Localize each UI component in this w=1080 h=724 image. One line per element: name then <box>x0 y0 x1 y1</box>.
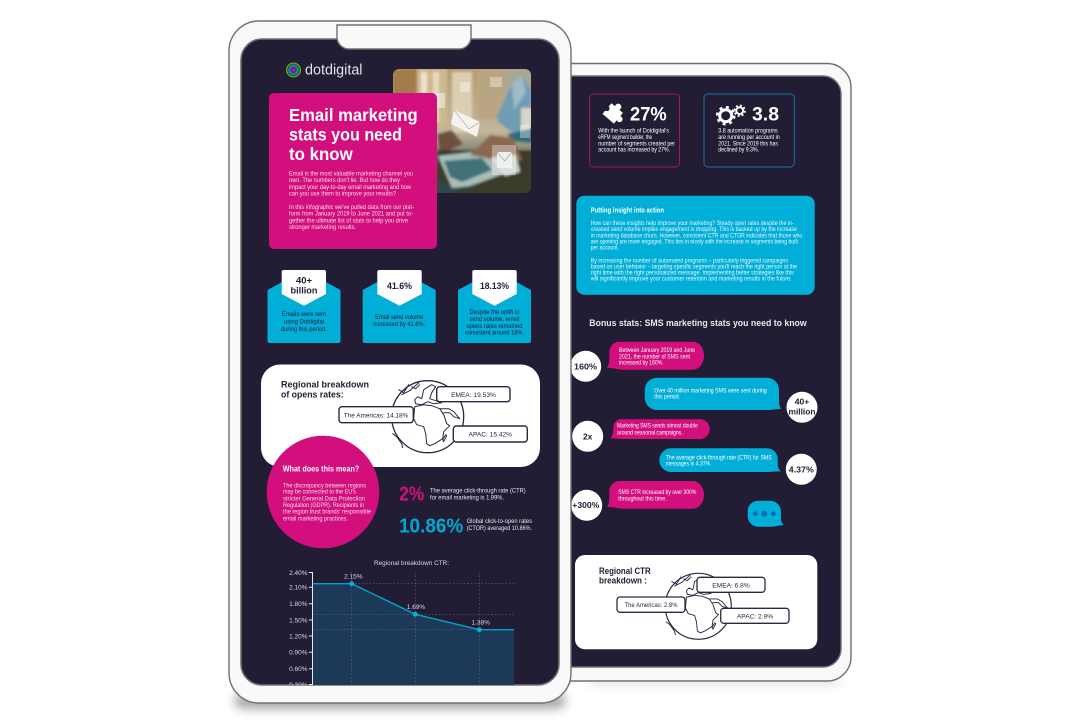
stat circle: 40+ million <box>786 392 818 423</box>
y axis labels: 1.80% <box>289 601 308 608</box>
stat: 2% ctr <box>399 484 526 506</box>
label: apac: APAC: 15.42% <box>469 432 512 439</box>
envelope card: 18.13% <box>458 270 531 343</box>
card: automation stat <box>704 94 794 167</box>
chart title: Regional breakdown CTR: <box>374 560 449 567</box>
stat: 10.86% ctor <box>399 515 532 537</box>
heading: bonus stats: Bonus stats: SMS marketing stats you need to know <box>589 318 808 328</box>
panel title: of opens rates: <box>281 390 344 400</box>
sms bubble: ctr 4.37%: The average click-through rate (CTR) for SMS <box>666 455 772 461</box>
sms bubble: 160%: 2021, the number of SMS sent <box>619 354 690 360</box>
stat circle: 4.37%: 4.37% <box>789 464 814 474</box>
panel body text: based on user behavior – targeting specific segments you'll reach the right person at the <box>591 264 798 270</box>
panel title: Regional breakdown <box>281 379 369 389</box>
callout: what does this mean <box>267 436 379 548</box>
label: emea <box>437 387 510 402</box>
stat circle: +300% <box>571 490 602 521</box>
label: the americas: The Americas: 14.18% <box>344 412 408 419</box>
panel: regional breakdown of open rates <box>261 364 540 467</box>
front phone screen <box>241 39 559 685</box>
y axis <box>309 572 312 690</box>
stat circle: 40+ million: 40+ <box>795 396 809 406</box>
callout text: may be connected to the EU's <box>283 490 356 496</box>
sms bubble: 160%: Between January 2019 and June <box>619 348 696 354</box>
automation description <box>718 129 780 154</box>
envelope card: 41.6%: increased by 41.6%. <box>373 322 426 328</box>
data point: 2.15%: 2.15% <box>344 574 363 581</box>
title <box>289 105 418 164</box>
envelope card: 40+ billion: using Dotdigital <box>284 319 324 325</box>
back phone <box>500 64 851 686</box>
panel body text: How can these insights help improve your marketing? Steady open rates despite the in- <box>591 221 794 227</box>
logo: dotdigital: dotdigital <box>305 62 362 78</box>
stat circle: 4.37% <box>786 454 817 485</box>
intro text: stronger marketing results. <box>289 225 356 231</box>
back phone shadow <box>590 676 840 686</box>
envelope icons <box>433 77 530 175</box>
automation description: declined by 9.3%. <box>718 148 759 154</box>
panel title <box>281 379 369 400</box>
data point: 1.69%: 1.69% <box>407 604 425 611</box>
envelope card: 18.13%: consistent around 18%. <box>465 330 524 336</box>
panel body text: per account. <box>591 246 619 252</box>
sms bubble: seasonal campaigns <box>610 419 710 439</box>
segments description: account has increased by 27%. <box>598 148 670 154</box>
panel: intro <box>269 93 437 249</box>
panel body text <box>590 221 803 283</box>
panel title: Regional CTR <box>599 566 651 576</box>
y axis labels <box>289 570 308 689</box>
front phone <box>229 21 571 709</box>
panel body text: are opening are more engaged. This ties in nicely with the increase in segments being built <box>591 239 798 245</box>
callout text: stricter General Data Protection <box>283 496 365 502</box>
envelope card: 18.13%: opens rates remained <box>466 324 522 330</box>
label: apac <box>453 426 527 442</box>
data point: 1.69% <box>407 604 425 617</box>
label: the americas <box>339 407 413 423</box>
chart: regional breakdown ctr <box>289 560 514 690</box>
area fill <box>313 584 514 690</box>
intro text: In this infographic we've pulled data from our plat- <box>289 205 414 211</box>
sms bubble: ctr 300%: throughout this time. <box>618 496 667 502</box>
stat: 10.86% ctor: (CTOR) averaged 10.86%. <box>467 526 532 532</box>
stat circle: +300%: +300% <box>572 500 600 510</box>
callout text <box>283 483 372 522</box>
panel title: breakdown : <box>599 576 647 586</box>
stat: 10.86% ctor: 10.86% <box>399 515 463 537</box>
label: the americas: The Americas: 2.8% <box>624 602 678 609</box>
stat: 2% ctr: 2% <box>399 484 424 506</box>
panel body text: in marketing database churn. However, consistent CTR and CTOR indicates that those who <box>591 233 803 239</box>
label: emea: EMEA: 6.8% <box>712 582 750 589</box>
sms bubble: ctr 300%: SMS CTR increased by over 300% <box>618 490 697 496</box>
label: the americas <box>617 597 685 612</box>
callout text: the region trust brands' responsible <box>283 510 372 516</box>
intro text: gether the ultimate list of stats to help you drive <box>289 218 409 224</box>
stat circle: 2x <box>572 421 603 452</box>
automation description: 2021. Since 2019 this has <box>718 141 778 147</box>
label: emea <box>697 577 765 592</box>
envelope card: 40+ billion: billion <box>290 286 318 297</box>
stat: 10.86% ctor: Global click-to-open rates <box>467 519 532 525</box>
panel body text: By increasing the number of automated programs – particularly triggered campaigns <box>591 258 788 264</box>
panel body text: right time with the right personalized message. Implementing better strategies like this <box>591 271 794 277</box>
envelope card: 40+ billion: during this period. <box>281 327 327 333</box>
callout text: The discrepancy between regions <box>283 483 366 489</box>
data line <box>313 584 514 630</box>
intro text: form from January 2019 to June 2021 and put to- <box>289 212 413 218</box>
segments description: With the launch of Dotdigital's <box>598 129 669 135</box>
stat circle: 40+ million: million <box>788 406 816 416</box>
panel: regional ctr breakdown <box>575 555 817 649</box>
stat circle: 160%: 160% <box>574 361 597 371</box>
icon: puzzle piece <box>600 98 629 126</box>
automation description: are running per account in <box>718 135 780 141</box>
y axis labels: 2.40% <box>289 570 308 577</box>
label: apac: APAC: 2.9% <box>737 613 773 620</box>
envelope card: 41.6% <box>363 270 436 343</box>
intro text: can you use them to improve your results? <box>289 192 397 198</box>
panel body text: creased send volume implies engagement is dropping. This is backed up by the increase <box>591 227 798 233</box>
title: Email marketing <box>289 105 418 125</box>
icon: typing bubble <box>748 501 784 527</box>
data point: 1.38%: 1.38% <box>471 619 490 626</box>
sms bubble: ctr 4.37%: messages is 4.37%. <box>666 461 712 467</box>
stat circle: 2x: 2x <box>583 431 593 441</box>
data point: 1.38% <box>471 619 490 632</box>
stat: 2% ctr: for email marketing is 1.99%. <box>430 496 504 502</box>
sms bubble: ctr 4.37% <box>659 448 781 472</box>
infographic <box>228 20 852 715</box>
y axis labels: 1.20% <box>289 633 308 640</box>
envelope card: 40+ billion: 40+ <box>296 276 313 287</box>
icon: globe <box>665 573 731 639</box>
callout heading: What does this mean? <box>283 464 359 473</box>
y axis labels: 0.90% <box>289 650 308 657</box>
panel title <box>599 566 651 586</box>
panel: putting insight into action <box>576 196 815 295</box>
stat: 2% ctr: The average click-through rate (CTR) <box>430 488 526 494</box>
intro text: Email is the most valuable marketing channel you <box>289 172 413 178</box>
intro text: own. The numbers don't lie. But how do they <box>289 178 400 184</box>
data point: 2.15% <box>344 574 363 586</box>
back phone body <box>500 64 851 681</box>
intro text <box>289 172 414 231</box>
envelope card: 18.13%: send volume, email <box>470 317 520 323</box>
title: stats you need <box>289 125 402 145</box>
callout text: email marketing practices. <box>283 516 348 522</box>
label: emea: EMEA: 19.53% <box>451 392 496 399</box>
stat: 3.8: 3.8 <box>752 105 779 126</box>
phone notch <box>337 25 471 49</box>
envelope card: 40+ billion: Emails were sent <box>282 312 326 318</box>
label: apac <box>721 608 789 623</box>
y axis labels: 0.30% <box>289 682 308 689</box>
y axis labels: 1.50% <box>289 617 308 624</box>
title: to know <box>289 144 353 164</box>
front phone body <box>229 21 571 703</box>
panel heading: Putting insight into action <box>591 208 664 214</box>
segments description: eRFM segment builder, the <box>598 135 652 141</box>
sms bubble: 160%: increased by 160%. <box>619 361 664 367</box>
sms bubble: 40 million: Over 40 million marketing SMS were sent during <box>654 388 767 394</box>
sms bubble: seasonal campaigns: Marketing SMS sends almost double <box>617 424 698 430</box>
photo: hands typing on laptop with envelopes <box>390 66 534 196</box>
y axis labels: 2.10% <box>289 585 308 592</box>
stat circle: 160% <box>570 351 601 382</box>
icon: globe <box>392 381 464 453</box>
sms bubble: 40 million <box>645 378 781 410</box>
panel body text: will significantly improve your customer retention and marketing results in the future. <box>590 277 792 283</box>
card: segments stat <box>590 94 680 167</box>
intro text: impact your day-to-day email marketing and how <box>289 185 412 191</box>
segments description <box>598 129 675 154</box>
sms bubble: ctr 300% <box>607 481 704 509</box>
envelope card: 40+ billion <box>268 270 340 343</box>
front phone shadow <box>234 693 566 709</box>
sms bubble: 160% <box>607 342 704 370</box>
automation description: 3.8 automation programs <box>718 129 778 135</box>
envelope card: 18.13%: 18.13% <box>480 281 509 292</box>
back phone screen <box>520 76 841 667</box>
callout text: Regulation (GDPR). Recipients in <box>283 503 364 509</box>
icon: gears <box>717 106 745 124</box>
stat: 27%: 27% <box>630 105 667 126</box>
envelope card: 41.6%: 41.6% <box>387 281 413 292</box>
envelope card: 18.13%: Despite the uplift in <box>470 310 520 316</box>
envelope card: 41.6%: Email send volume <box>375 315 424 321</box>
sms bubble: 40 million: this period. <box>654 395 680 401</box>
segments description: number of segments created per <box>598 141 675 147</box>
y axis labels: 0.60% <box>289 666 308 673</box>
sms bubble: seasonal campaigns: around seasonal campaigns. <box>617 430 683 436</box>
